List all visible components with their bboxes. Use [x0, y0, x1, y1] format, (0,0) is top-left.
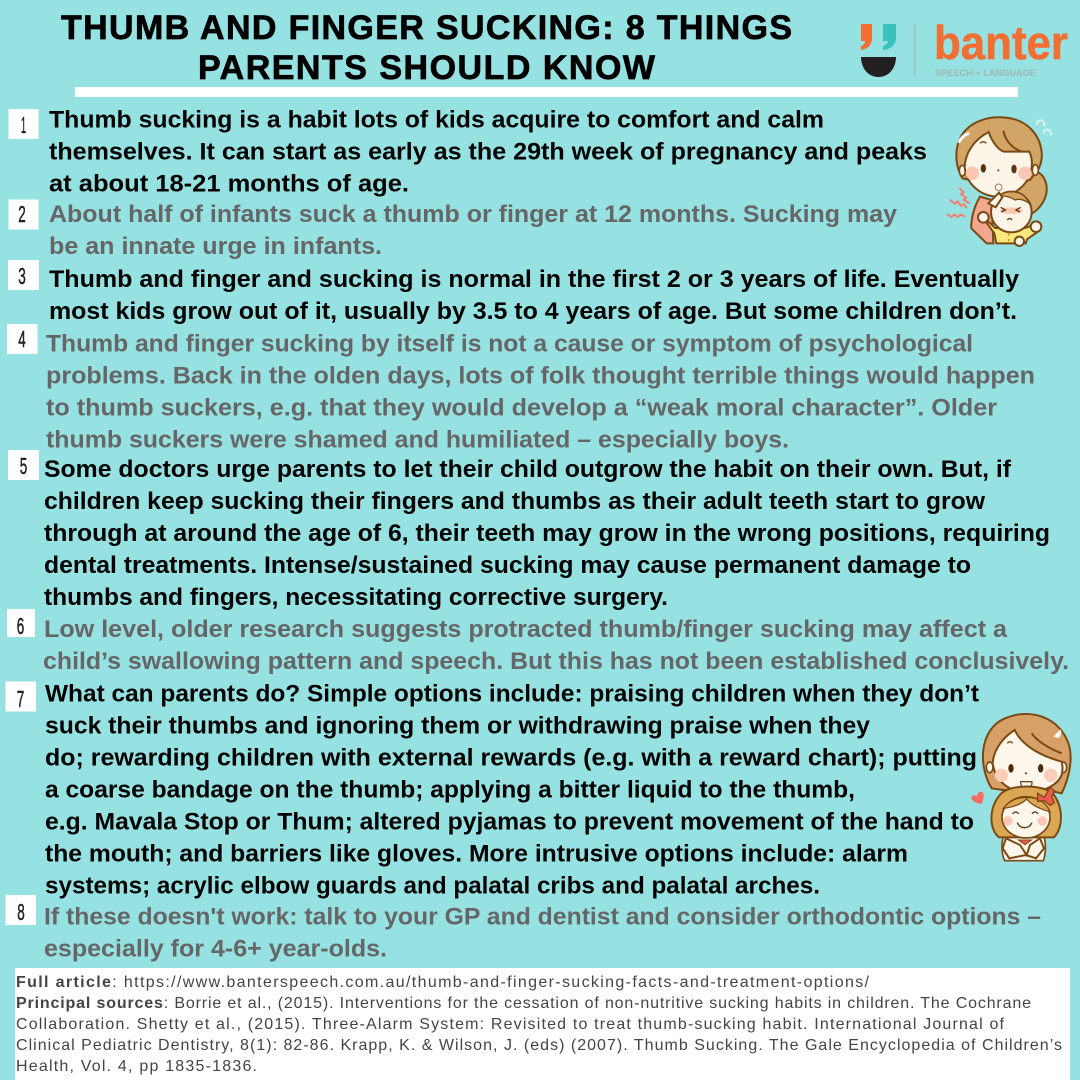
text: item 5	[44, 456, 1050, 611]
number badge 3	[8, 260, 39, 290]
number badge 8	[6, 895, 36, 925]
text: item 7: systems; acrylic elbow guards and palatal cribs and palatal arches.	[45, 872, 820, 900]
text: item 4: thumb suckers were shamed and humiliated – especially boys.	[46, 426, 789, 454]
number badge 5	[8, 450, 39, 480]
text: item 8	[44, 904, 1041, 962]
text: item 4	[46, 330, 1035, 454]
number badge 4	[7, 324, 38, 354]
text: item 5: children keep sucking their fingers and thumbs as their adult teeth start to grow	[44, 488, 985, 515]
footer: sources: Collaboration. Shetty et al., (2015). Three-Alarm System: Revisited to treat thumb-sucking habit. International Journal of	[16, 1016, 1005, 1033]
footer: sources	[15, 968, 1070, 1080]
text: item 1: at about 18-21 months of age.	[49, 170, 409, 198]
heart	[971, 792, 984, 804]
item 8	[6, 895, 1041, 962]
item 2	[8, 200, 898, 260]
footer: sources: Principal sources: Borrie et al., (2015). Interventions for the cessation of non-nutritive sucking habits in children. The Cochrane	[16, 995, 1031, 1012]
text: item 3: Thumb and finger and sucking is normal in the first 2 or 3 years of life. Eventually	[49, 266, 1020, 293]
text: item 8: If these doesn't work: talk to your GP and dentist and consider orthodontic options –	[44, 904, 1041, 930]
logo: banter: banter	[934, 16, 1068, 69]
item 5	[8, 450, 1050, 611]
item 7	[6, 680, 979, 900]
text: item 3	[49, 266, 1020, 325]
text: item 8: especially for 4-6+ year-olds.	[44, 936, 387, 962]
text: item 5: Some doctors urge parents to let their child outgrow the habit on their own. But, if	[44, 456, 1012, 483]
number badge 6	[7, 609, 35, 639]
item 3	[8, 260, 1020, 325]
text: item 6: child’s swallowing pattern and speech. But this has not been established conclusively.	[43, 648, 1069, 675]
text: item 7: e.g. Mavala Stop or Thum; altered pyjamas to prevent movement of the hand to	[45, 808, 974, 836]
item 4	[7, 324, 1035, 454]
text: item 5: through at around the age of 6, their teeth may grow in the wrong positions, requiring	[44, 520, 1050, 547]
item 1	[8, 106, 927, 198]
number badge 2: 2	[18, 201, 26, 227]
text: item 2: be an innate urge in infants.	[49, 233, 382, 260]
logo: banter: SPEECH + LANGUAGE	[935, 68, 1036, 79]
text: item 7: suck their thumbs and ignoring them or withdrawing praise when they	[45, 712, 871, 740]
text: item 1: themselves. It can start as early as the 29th week of pregnancy and peaks	[49, 138, 927, 166]
number badge 7: 7	[17, 686, 24, 712]
number badge 4: 4	[18, 326, 26, 352]
item 6	[7, 609, 1069, 675]
text: item 4: Thumb and finger sucking by itself is not a cause or symptom of psychological	[46, 330, 973, 358]
number badge 8: 8	[17, 899, 25, 925]
number badge 5: 5	[20, 453, 27, 479]
text: item 2: About half of infants suck a thumb or finger at 12 months. Sucking may	[49, 201, 898, 228]
title: THUMB AND FINGER SUCKING: 8 THINGS	[61, 9, 792, 47]
sweat marks and squiggles	[948, 120, 1051, 217]
text: item 5: thumbs and fingers, necessitating corrective surgery.	[44, 584, 668, 611]
text: item 3: most kids grow out of it, usually by 3.5 to 4 years of age. But some children don’t.	[49, 298, 1017, 325]
number badge 1	[8, 109, 38, 139]
number badge 2	[8, 200, 38, 230]
text: item 7	[45, 680, 979, 900]
number badge 7	[6, 682, 36, 712]
footer: sources: Clinical Pediatric Dentistry, 8(1): 82-86. Krapp, K. & Wilson, J. (eds) (2007). Thumb Sucking. The Gale Encyclopedia of Children’s	[16, 1037, 1062, 1054]
illustration: mother hugging child	[971, 714, 1071, 861]
number badge 3: 3	[18, 263, 26, 289]
footer: sources: Full article: https://www.banterspeech.com.au/thumb-and-finger-sucking-facts-and-treatment-options/	[16, 974, 870, 991]
text: item 6: Low level, older research suggests protracted thumb/finger sucking may affect a	[44, 616, 1008, 643]
title: PARENTS SHOULD KNOW	[198, 49, 656, 87]
number badge 6: 6	[17, 613, 24, 639]
text: item 7: a coarse bandage on the thumb; applying a bitter liquid to the thumb,	[45, 776, 855, 804]
text: item 7: What can parents do? Simple options include: praising children when they don’t	[45, 680, 979, 708]
title	[61, 9, 792, 87]
text: item 6	[43, 616, 1069, 675]
text: item 4: to thumb suckers, e.g. that they would develop a “weak moral character”. Older	[46, 394, 997, 422]
text: item 1	[49, 106, 927, 198]
text: item 5: dental treatments. Intense/sustained sucking may cause permanent damage to	[44, 552, 971, 579]
illustration: mother comforting baby	[948, 117, 1051, 246]
number badge 1: 1	[21, 112, 26, 138]
text: item 2	[49, 201, 898, 260]
footer: sources: Health, Vol. 4, pp 1835-1836.	[16, 1058, 257, 1075]
text: item 7: the mouth; and barriers like gloves. More intrusive options include: alarm	[45, 840, 908, 868]
text: item 1: Thumb sucking is a habit lots of kids acquire to comfort and calm	[49, 106, 824, 134]
text: item 4: problems. Back in the olden days, lots of folk thought terrible things would happen	[46, 362, 1035, 390]
logo: banter	[861, 16, 1068, 79]
text: item 7: do; rewarding children with external rewards (e.g. with a reward chart); putting	[45, 744, 977, 772]
